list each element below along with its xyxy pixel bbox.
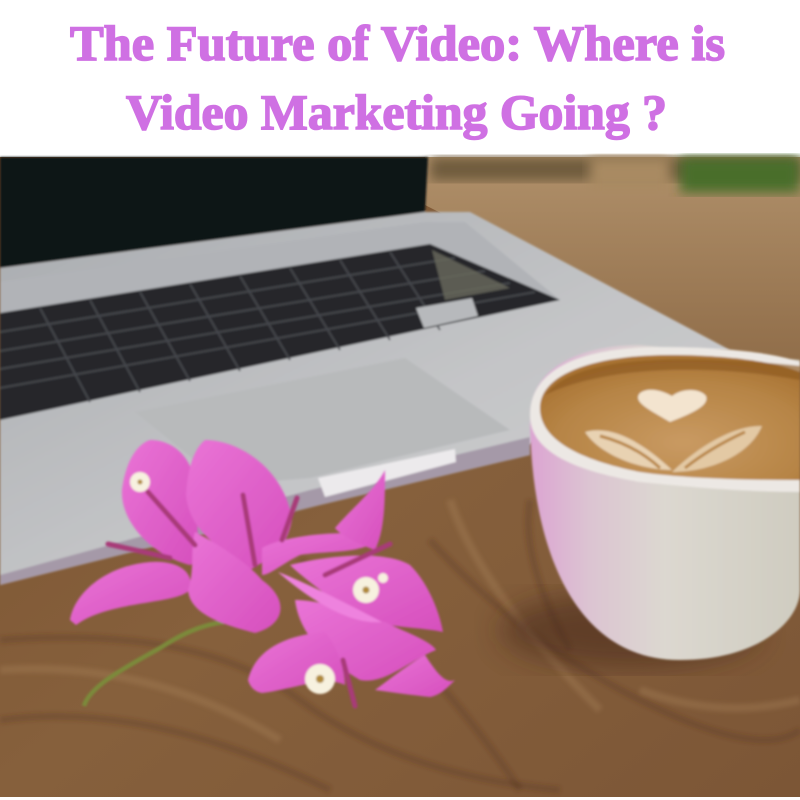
keyboard <box>0 244 560 420</box>
flower <box>70 440 455 706</box>
coffee cup <box>530 345 800 660</box>
table shadow under cup <box>500 592 760 668</box>
small white blossoms <box>130 472 388 694</box>
wooden table <box>0 157 800 797</box>
title: The Future of Video: Where is <box>70 15 725 71</box>
flower stamens <box>108 492 390 706</box>
title: Video Marketing Going ? <box>126 84 667 140</box>
petals <box>70 440 455 697</box>
laptop front edge <box>0 437 530 585</box>
photo: laptop, coffee and flower on a wooden table <box>0 157 800 797</box>
latte art <box>638 390 707 422</box>
stem <box>84 622 224 706</box>
title <box>70 15 725 140</box>
coffee surface <box>540 355 800 480</box>
laptop <box>0 157 730 585</box>
trackpad <box>135 358 510 485</box>
